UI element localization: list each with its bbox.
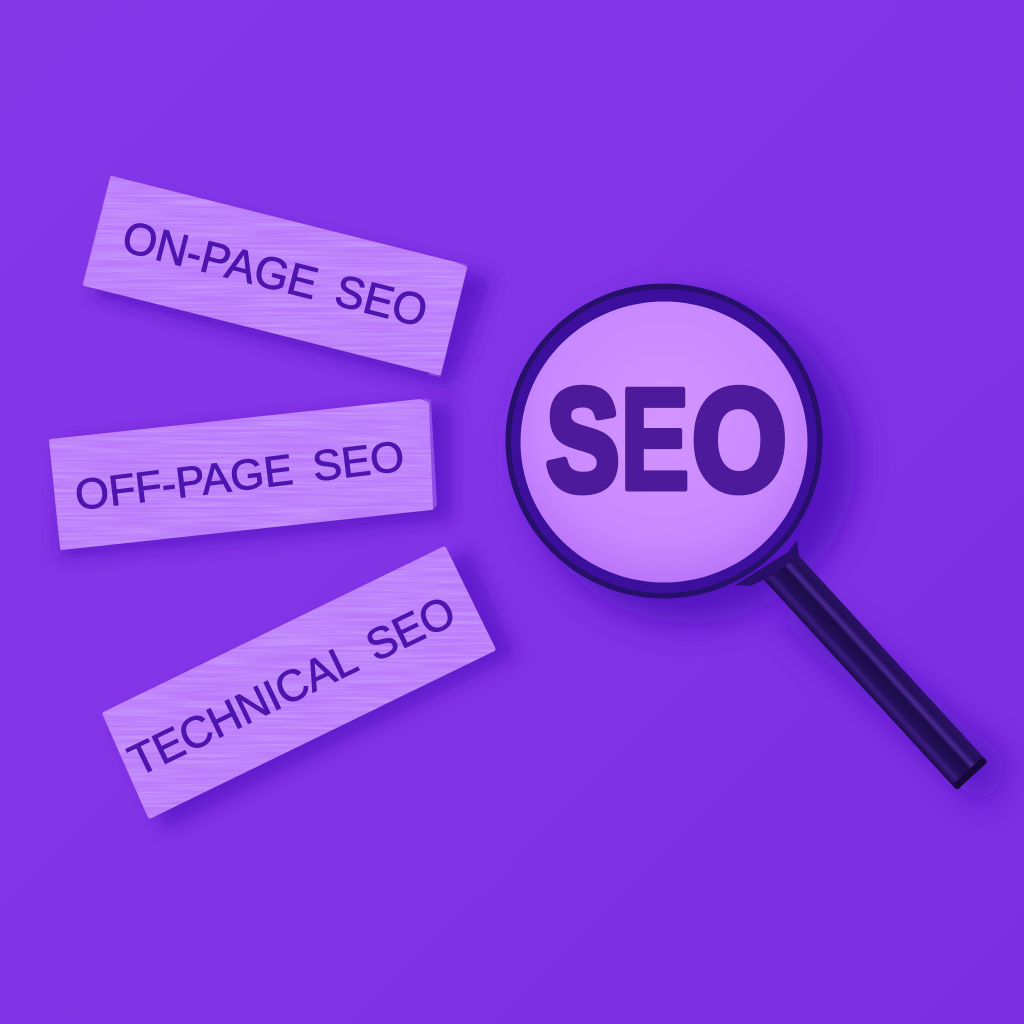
panel: off-page seo block	[51, 398, 452, 558]
icon: magnifying glass	[506, 284, 1010, 810]
heading: big seo: S	[546, 359, 619, 522]
label: on-page seo: ON-PAGE SEO	[118, 211, 433, 337]
magnifier handle	[762, 549, 988, 790]
panel: on-page seo block	[85, 178, 492, 388]
heading: big seo: O	[692, 360, 787, 521]
label: technical seo: TECHNICAL SEO	[121, 587, 463, 786]
heading: big seo: E	[620, 358, 690, 520]
heading: big seo	[546, 358, 787, 522]
panel: technical seo block	[105, 549, 516, 830]
label: off-page seo: OFF-PAGE SEO	[72, 433, 407, 520]
